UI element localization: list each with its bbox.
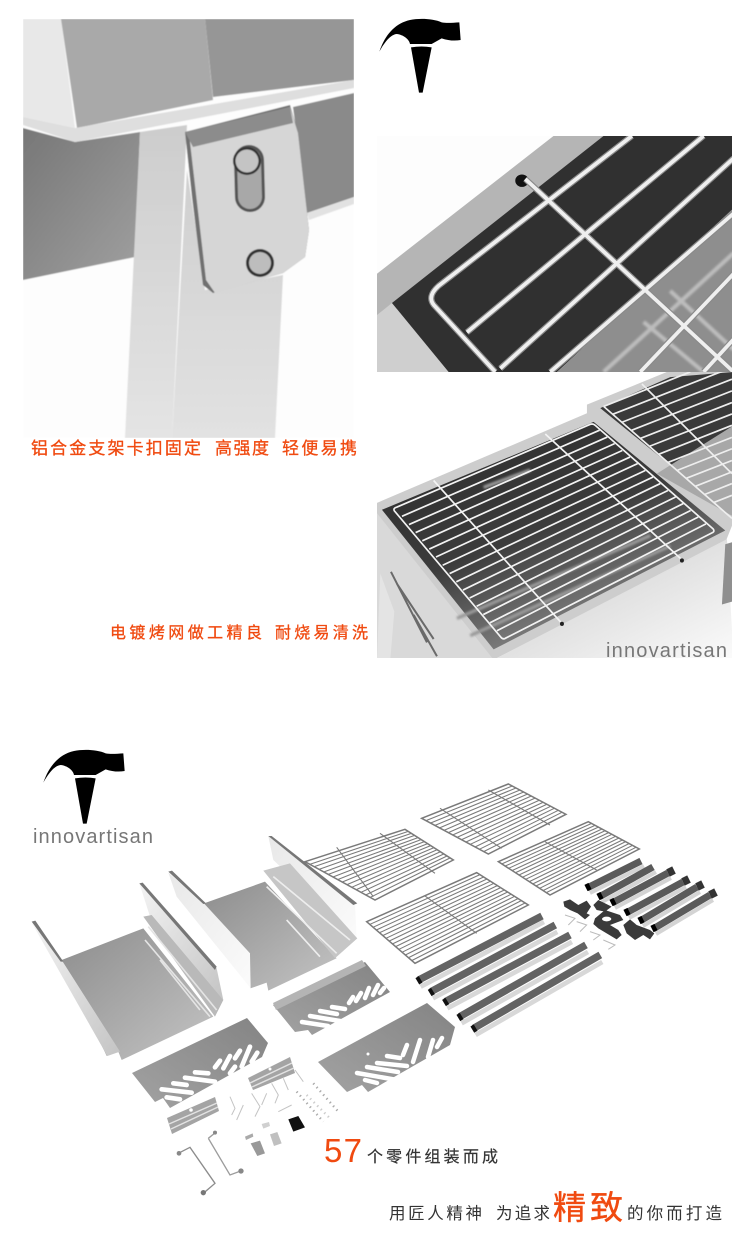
photo: wire grill close-up — [377, 136, 734, 372]
text: 57 parts — [324, 1132, 498, 1169]
brand name: innovartisan — [33, 826, 153, 848]
vent panel centre — [273, 960, 390, 1035]
text: 57 parts: 个零件组装而成 — [367, 1148, 498, 1166]
photo: grill top view — [377, 367, 734, 662]
pan right — [168, 836, 357, 991]
long square tubes — [417, 916, 602, 1035]
logo: hammer bottom — [43, 750, 125, 824]
exploded parts diagram — [32, 784, 716, 1195]
photo: aluminium leg bracket — [23, 19, 354, 438]
text: craftsman tagline: 用匠人精神 — [389, 1204, 482, 1223]
vent panel right — [318, 1003, 455, 1092]
black leg connectors — [563, 899, 654, 949]
text: craftsman tagline — [389, 1189, 722, 1226]
grill racks — [305, 784, 639, 963]
short square tubes — [586, 861, 716, 934]
watermark: innovartisan — [606, 640, 727, 662]
caption: grill: 耐烧易清洗 — [275, 624, 368, 642]
small hardware — [177, 1070, 338, 1195]
pan left — [32, 883, 223, 1060]
text: craftsman tagline: 的你而打造 — [627, 1204, 722, 1223]
caption: grill: 电镀烤网做工精良 — [110, 624, 262, 642]
caption: grill — [110, 624, 368, 642]
text: craftsman tagline: 精致 — [553, 1189, 623, 1226]
vent panel left — [132, 1018, 268, 1108]
logo: hammer top — [379, 19, 461, 93]
caption: bracket: 高强度 — [215, 439, 269, 458]
text: craftsman tagline: 为追求 — [496, 1204, 550, 1223]
rail brackets — [167, 1057, 295, 1134]
text: 57 parts: 57 — [324, 1132, 362, 1169]
caption: bracket: 轻便易携 — [282, 439, 357, 458]
caption: bracket: 铝合金支架卡扣固定 — [31, 439, 201, 458]
caption: bracket — [31, 439, 357, 458]
